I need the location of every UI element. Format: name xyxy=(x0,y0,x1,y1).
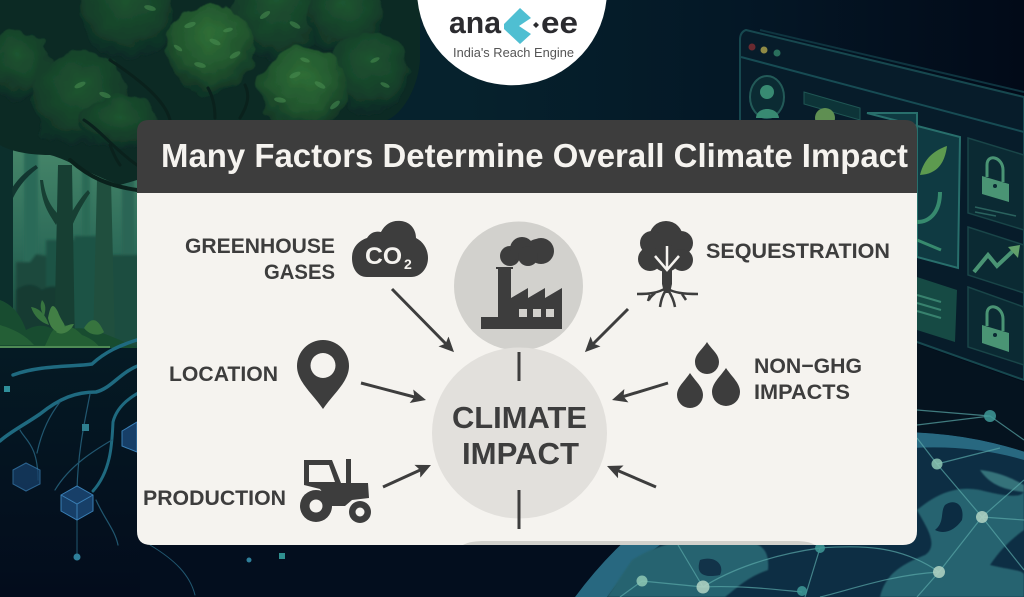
avatar xyxy=(750,76,784,118)
lock card bottom xyxy=(968,287,1024,365)
header bar xyxy=(137,120,917,193)
arrow: sequestration xyxy=(592,309,628,345)
logo badge xyxy=(418,0,606,85)
list card xyxy=(917,277,957,342)
icon: tractor xyxy=(300,459,371,523)
label: greenhouse gases xyxy=(185,234,335,284)
centre label xyxy=(452,400,587,471)
leaves xyxy=(74,4,390,111)
centre label: CLIMATE xyxy=(452,400,587,435)
window dots xyxy=(748,44,780,56)
label: non-GHG impacts: NON−GHG xyxy=(754,354,862,378)
label: non-GHG impacts xyxy=(754,354,862,404)
icon: water drops xyxy=(677,342,740,408)
panel body xyxy=(137,190,917,545)
icon: CO2 cloud: CO xyxy=(365,243,402,270)
label: non-GHG impacts: IMPACTS xyxy=(754,380,850,404)
below ground xyxy=(0,348,140,597)
trend card xyxy=(968,227,1024,293)
data cubes xyxy=(4,386,285,562)
leaf card xyxy=(867,113,960,268)
centre label: IMPACT xyxy=(462,436,579,471)
main panel xyxy=(137,120,917,545)
label: greenhouse gases: GREENHOUSE xyxy=(185,234,335,258)
dashboard screen xyxy=(740,30,1024,597)
connector lines xyxy=(518,352,520,529)
network nodes xyxy=(636,410,996,596)
climate impact circle xyxy=(432,348,607,518)
arrow: greenhouse gases xyxy=(392,289,447,345)
logo wordmark: ee xyxy=(541,5,578,40)
icon: CO2 cloud xyxy=(352,221,428,277)
label: sequestration: SEQUESTRATION xyxy=(706,239,890,263)
icon: location pin xyxy=(297,340,349,409)
label: greenhouse gases: GASES xyxy=(264,260,335,284)
factory circle xyxy=(454,222,583,350)
digital roots xyxy=(0,339,195,595)
globe limb highlight xyxy=(575,432,1024,597)
tree trunks xyxy=(0,130,115,350)
title: Many Factors Determine Overall Climate Impact xyxy=(161,137,908,174)
icon: CO2 cloud: 2 xyxy=(404,256,412,272)
icon: logo mark xyxy=(504,8,531,44)
bottom circle peek xyxy=(463,541,815,545)
lock card top xyxy=(968,138,1024,230)
logo wordmark: ana xyxy=(449,5,502,40)
tree canopy xyxy=(0,0,420,190)
network lines xyxy=(620,410,1024,597)
arrow: non-GHG impacts xyxy=(622,383,668,397)
arrow: location xyxy=(361,383,416,398)
logo wordmark xyxy=(449,5,578,44)
arrow: lower right xyxy=(616,470,656,487)
branches xyxy=(70,60,248,190)
logo tagline: India's Reach Engine xyxy=(453,45,574,60)
continents xyxy=(607,470,1024,597)
icon: factory xyxy=(481,237,562,329)
forest floor plants xyxy=(0,300,137,348)
label: location: LOCATION xyxy=(169,362,278,386)
label: production: PRODUCTION xyxy=(143,486,286,510)
icon: tree with roots xyxy=(637,221,698,307)
forest illustration xyxy=(0,130,150,597)
arrow: production xyxy=(383,469,422,487)
globe xyxy=(575,410,1024,597)
